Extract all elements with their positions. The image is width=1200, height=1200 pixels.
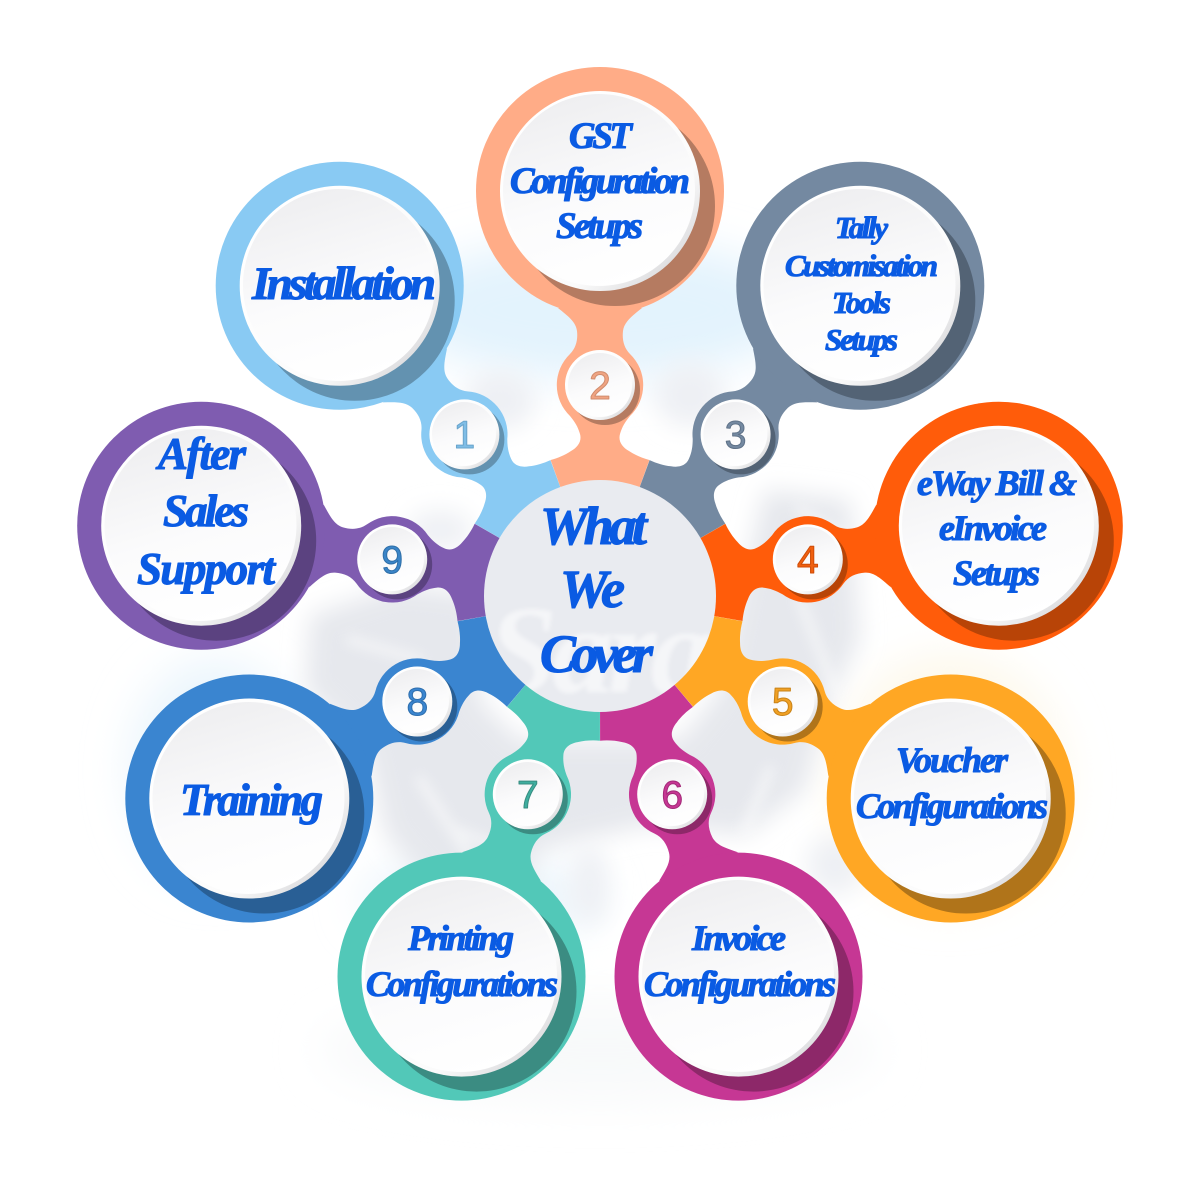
central hub: What We Cover — [484, 480, 716, 720]
disc shadow 8 — [164, 714, 364, 914]
label disc 2 — [500, 91, 700, 291]
number badge 1 — [429, 399, 504, 474]
label disc 8 — [149, 698, 349, 898]
label text 3: Customisation — [785, 248, 938, 283]
label text 2: Configuration — [510, 161, 690, 202]
item 1: Installation — [216, 162, 577, 556]
label text 9: After — [155, 429, 246, 479]
label disc 9 — [101, 426, 301, 626]
disc shadow 9 — [116, 441, 316, 641]
label text 3 — [785, 210, 938, 357]
label text 9 — [137, 429, 276, 594]
label text 2: Setups — [556, 206, 643, 247]
item 7: Printing Configurations — [338, 667, 614, 1101]
connector arm 3 — [623, 344, 823, 556]
hub title — [540, 496, 654, 684]
hub title: We — [560, 559, 625, 619]
label text 4: Setups — [953, 553, 1040, 593]
item 9: After Sales Support — [77, 402, 516, 650]
number badge 2: 2 — [589, 365, 611, 408]
disc shadow 7 — [376, 892, 576, 1092]
item 4: eWay Bill and eInvoice Setups — [684, 402, 1123, 650]
item 2: GST Configuration Setups — [476, 67, 724, 502]
hub title: Cover — [540, 624, 654, 684]
hub watermark: Sara — [488, 582, 713, 720]
label disc 4 — [899, 426, 1099, 626]
label disc 5 — [851, 698, 1051, 898]
ring 3 — [736, 162, 984, 410]
label text 2: GST — [569, 116, 633, 157]
number badge 6 — [637, 759, 712, 834]
ring 2 — [476, 67, 724, 315]
label text 6 — [644, 918, 836, 1004]
number badge 3: 3 — [725, 414, 746, 457]
number badge 4: 4 — [797, 539, 819, 582]
ring 6 — [614, 853, 862, 1101]
label text 2 — [510, 116, 690, 247]
number badge 2 — [565, 350, 640, 425]
item 6: Invoice Configurations — [586, 667, 862, 1101]
label text 7: Configurations — [366, 964, 558, 1004]
label text 6: Configurations — [644, 964, 836, 1004]
disc shadow 5 — [866, 714, 1066, 914]
number badge 5 — [748, 666, 823, 742]
disc shadow 4 — [914, 441, 1114, 641]
label text 7: Printing — [407, 918, 514, 958]
ring 8 — [125, 674, 373, 922]
ring 9 — [77, 402, 325, 650]
number badge 9 — [357, 524, 432, 599]
number badge 4 — [773, 524, 848, 599]
connector arm 4 — [684, 497, 892, 628]
label text 9: Sales — [163, 486, 249, 536]
number badge 6: 6 — [661, 774, 683, 817]
label text 8: Training — [180, 775, 323, 825]
number badge 3 — [701, 399, 776, 474]
item 8: Training — [125, 600, 543, 922]
label text 3: Tools — [832, 285, 891, 320]
label disc 6 — [638, 877, 838, 1077]
connector arm 8 — [326, 600, 543, 783]
label text 4 — [917, 463, 1077, 593]
label text 3: Tally — [835, 210, 888, 245]
disc shadow 6 — [654, 892, 854, 1092]
label text 5: Configurations — [856, 786, 1048, 826]
label disc 7 — [362, 877, 562, 1077]
disc shadow 3 — [775, 201, 975, 401]
hub title: What — [540, 496, 649, 556]
label text 7 — [366, 918, 558, 1004]
label text 4: eWay Bill & — [917, 463, 1077, 503]
connector arm 7 — [455, 667, 614, 884]
label text 3: Setups — [825, 322, 898, 357]
label text 9: Support — [137, 544, 276, 594]
number badge 8: 8 — [406, 681, 428, 724]
label text 5: Voucher — [896, 740, 1009, 780]
disc shadow 1 — [255, 201, 455, 401]
item 5: Voucher Configurations — [657, 600, 1075, 922]
number badge 7 — [493, 759, 568, 834]
label disc 3 — [760, 186, 960, 386]
connector arm 5 — [657, 600, 874, 783]
item 3: Tally Customisation Tools Setups — [623, 162, 984, 556]
number badge 1: 1 — [454, 414, 475, 457]
label text 1: Installation — [251, 258, 436, 310]
label text 4: eInvoice — [939, 508, 1047, 548]
label text 6: Invoice — [691, 918, 786, 958]
connector arm 2 — [551, 308, 649, 502]
connector arm 9 — [308, 497, 516, 628]
ring 7 — [338, 853, 586, 1101]
label text 5 — [856, 740, 1048, 826]
ring 1 — [216, 162, 464, 410]
hub disc — [484, 480, 716, 712]
number badge 7: 7 — [517, 774, 539, 817]
disc shadow 2 — [515, 106, 715, 306]
ring 5 — [827, 674, 1075, 922]
number badge 8 — [382, 666, 457, 742]
number badge 5: 5 — [772, 681, 794, 724]
connector arm 1 — [377, 344, 577, 556]
number badge 9: 9 — [381, 539, 403, 582]
label disc 1 — [240, 186, 440, 386]
ring 4 — [875, 402, 1123, 650]
connector arm 6 — [586, 667, 745, 884]
